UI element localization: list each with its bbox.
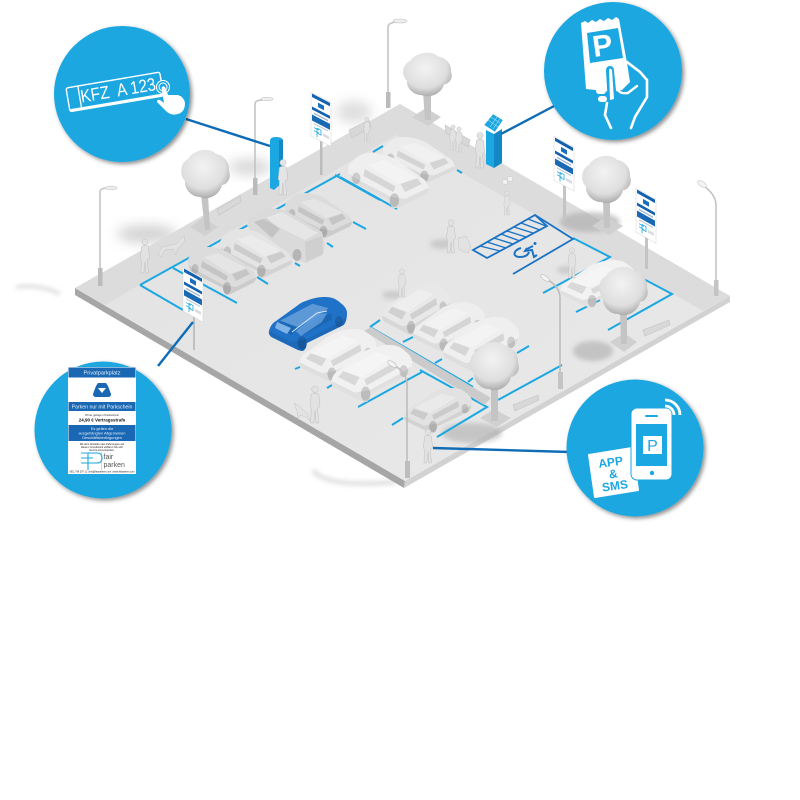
median strip <box>364 327 491 405</box>
ground shadows <box>16 101 395 484</box>
blue car <box>269 297 347 351</box>
sign far right <box>636 188 656 269</box>
card: app and sms: SMS <box>601 477 629 495</box>
sign poster: diesem Grundstück erklären Sie sich <box>81 445 124 449</box>
sign poster: 0911 796 297 11 | info@fairparken.com | www.fairparken.com <box>69 471 135 474</box>
van <box>247 208 325 263</box>
sign poster: Ohne gültigen Parkschein <box>85 413 120 417</box>
disabled parking bay <box>473 215 573 274</box>
sign poster: ausgehängten Allgemeinen <box>79 430 125 436</box>
card: app and sms: APP <box>597 454 624 471</box>
tree 3 <box>582 156 631 235</box>
solar ticket machine <box>484 114 503 168</box>
card: app and sms <box>589 448 638 497</box>
lamp posts <box>98 19 718 296</box>
icon: pointing hand <box>156 80 185 115</box>
benches <box>217 120 670 411</box>
sign poster: hiermit einverstanden. <box>89 448 115 452</box>
parking platform <box>75 104 730 488</box>
lamp posts: front <box>387 273 563 478</box>
sign poster: Es gelten die <box>91 426 113 431</box>
people and dogs <box>140 117 576 463</box>
icon: wheelchair <box>514 242 537 257</box>
sign poster: Mit dem Abstellen des Fahrzeuges auf <box>80 442 124 446</box>
sign left <box>183 267 203 350</box>
icon: signal waves <box>665 400 680 415</box>
parking signs <box>183 92 656 350</box>
circle: parking ticket in hand <box>544 2 682 140</box>
tree 2 <box>403 53 452 126</box>
connector lines <box>158 105 570 452</box>
sign right <box>554 136 574 221</box>
circle: licence plate entry <box>54 26 190 162</box>
parking bay markings <box>140 146 672 437</box>
trees <box>181 53 648 427</box>
tree shadows on ground <box>382 212 620 443</box>
person at pillar <box>278 159 288 195</box>
tree 4 <box>599 267 648 352</box>
circle: app and SMS <box>566 380 704 516</box>
sign poster: Geschäftsbedingungen <box>82 435 122 440</box>
sign poster: Parken nur mit Parkschein <box>72 404 133 410</box>
tree 1 <box>181 150 230 236</box>
sign poster: 24,90 € Vertragsstrafe <box>79 418 126 422</box>
payment terminal: blue pillar <box>270 137 283 190</box>
licence plate: KFZ A 123 <box>79 74 157 107</box>
logo: fair parken <box>81 452 125 470</box>
sign top <box>311 92 331 175</box>
card: app and sms: & <box>608 466 619 482</box>
icon: hand holding ticket: P <box>590 28 615 64</box>
sidewalk <box>75 104 730 311</box>
cars: middle rows <box>299 260 635 433</box>
sign poster: Privatparkplatz <box>84 371 121 377</box>
icon: parking terminal <box>93 383 111 397</box>
tree 5 <box>470 342 519 427</box>
circle: parking sign detail <box>34 362 172 498</box>
icon: smartphone: P <box>647 438 658 455</box>
cars: left row <box>188 193 352 295</box>
logo: fair parken: fair <box>104 454 114 461</box>
cars: top row <box>348 137 455 208</box>
sign poster <box>68 367 136 474</box>
logo: fair parken: parken <box>104 462 125 469</box>
